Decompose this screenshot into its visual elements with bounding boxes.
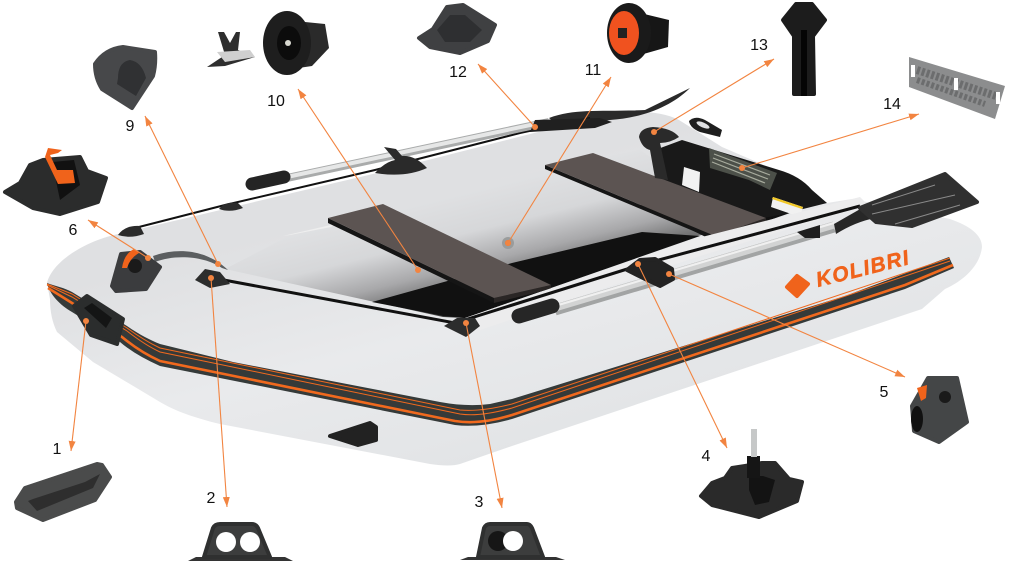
part 10: air valve and cap — [207, 11, 329, 75]
number 12: 12 — [449, 64, 467, 81]
number 4: 4 — [702, 448, 711, 465]
near strip — [465, 197, 868, 330]
arrow 11 — [505, 77, 611, 246]
transom label yellow — [771, 197, 803, 217]
logo mark — [787, 276, 808, 296]
part 6: oar holder with orange clip — [5, 148, 106, 214]
bottom patch — [330, 423, 376, 445]
number 6: 6 — [69, 222, 78, 239]
arrow 14 — [739, 114, 919, 171]
seam on far tube — [283, 224, 335, 236]
floor — [372, 232, 700, 318]
near oarlock — [627, 259, 673, 286]
arrow 6 — [88, 220, 151, 261]
arrow 12 — [478, 64, 538, 130]
part 14: transom plate — [909, 57, 1005, 119]
far mid cleat — [219, 203, 243, 211]
bow valve with orange clip — [112, 249, 160, 291]
part 3: rope holder side — [460, 524, 565, 560]
number 10: 10 — [267, 93, 285, 110]
part 13: transom handle — [783, 4, 825, 96]
rear seat — [545, 153, 766, 240]
near oar — [519, 174, 977, 316]
near cleat 2 — [195, 269, 230, 288]
number 13: 13 — [750, 37, 768, 54]
arrow 9 — [145, 116, 221, 267]
dark under rear seat — [640, 190, 790, 240]
near cleat 3 — [444, 318, 480, 337]
transom corner handle — [639, 127, 679, 180]
bow strap — [153, 251, 228, 270]
arrows and numbers — [53, 37, 919, 511]
transom — [655, 140, 827, 225]
part 12: oar holder fitting — [419, 5, 495, 53]
stripe band — [47, 257, 954, 426]
hull — [47, 112, 982, 466]
arrow 2 — [208, 275, 227, 507]
number 9: 9 — [126, 118, 135, 135]
number 2: 2 — [207, 490, 216, 507]
number 5: 5 — [880, 384, 889, 401]
far oar — [252, 118, 612, 184]
arrow 5 — [666, 271, 905, 377]
number 14: 14 — [883, 96, 901, 113]
part 9: triangular fitting — [95, 47, 155, 108]
arrow 3 — [463, 320, 502, 508]
part 4: oarlock with pin — [701, 429, 802, 517]
arrow 4 — [635, 261, 727, 448]
far oar blade — [549, 88, 690, 127]
far cleat — [118, 226, 144, 237]
brand logo — [787, 246, 912, 296]
part 2: rope holder — [188, 524, 293, 561]
far rope — [135, 118, 590, 228]
part 1: bow handle — [16, 464, 110, 520]
part 5: oar clamp — [911, 378, 967, 442]
arrow 13 — [651, 59, 774, 135]
front seat — [328, 204, 551, 303]
number 3: 3 — [475, 494, 484, 511]
inflatable boat — [47, 88, 982, 466]
wordmark: KOLIBRI — [814, 246, 912, 292]
arrow 1 — [71, 318, 89, 451]
near rope — [213, 206, 860, 323]
transom label white — [682, 167, 700, 192]
bow handle — [74, 296, 123, 344]
part 11: orange valve — [607, 3, 669, 63]
boat interior — [225, 150, 780, 318]
arrow 10 — [298, 89, 421, 273]
handle on transom — [689, 118, 722, 137]
number 11: 11 — [585, 62, 601, 79]
valve on floor — [502, 237, 514, 249]
transom plate — [709, 148, 777, 190]
orange stripes — [47, 258, 953, 422]
number 1: 1 — [53, 441, 62, 458]
